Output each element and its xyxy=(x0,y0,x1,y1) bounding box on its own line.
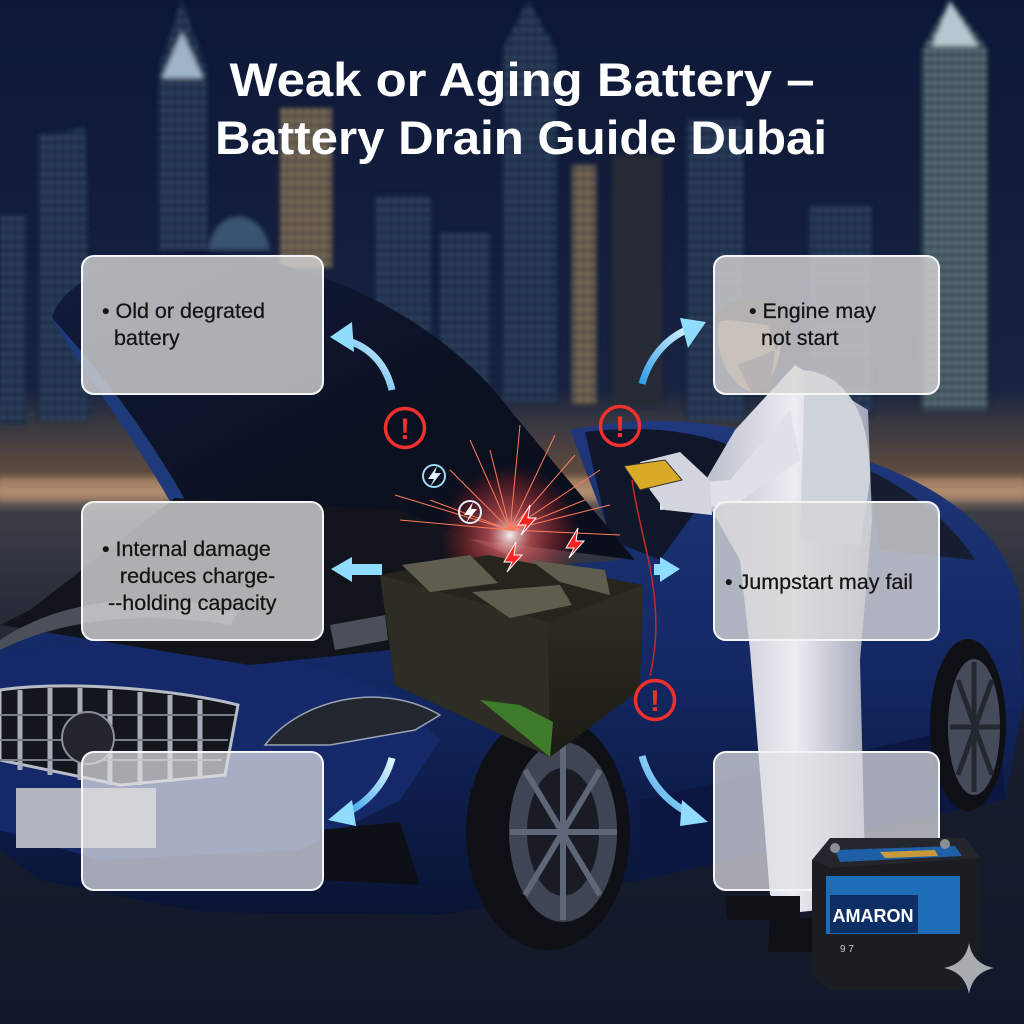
headlight xyxy=(265,697,440,745)
text: internal damage: • Internal damage reduces charge- ‐‐holding capacity xyxy=(102,537,276,615)
title: Weak or Aging Battery – xyxy=(230,53,814,106)
title xyxy=(215,53,827,164)
open hood xyxy=(52,252,635,560)
boots xyxy=(725,896,815,952)
sparks xyxy=(395,425,620,605)
arrow heads xyxy=(328,318,708,826)
arrows xyxy=(342,328,695,816)
alert icons: ! xyxy=(400,413,410,446)
panel: empty lower left xyxy=(81,751,324,891)
windshield and side window xyxy=(585,429,740,560)
mechanic xyxy=(624,297,872,952)
text: engine: • Engine may not start xyxy=(749,299,876,350)
engine bay xyxy=(0,498,520,665)
replacement battery: Amaron: AMARON xyxy=(832,906,914,926)
panel: internal damage xyxy=(81,501,324,641)
alert icons xyxy=(386,406,674,720)
gloves and multimeter xyxy=(640,452,712,515)
bolt badges xyxy=(423,465,584,572)
panel: empty lower right xyxy=(713,751,940,891)
sparkle watermark xyxy=(944,943,994,994)
replacement battery: Amaron: 9 7 xyxy=(840,944,854,955)
car body xyxy=(0,421,1024,950)
text: jumpstart: • Jumpstart may fail xyxy=(725,570,913,594)
probe wire xyxy=(632,480,656,676)
front wheel xyxy=(466,714,630,950)
alert icons: ! xyxy=(650,685,660,718)
alert icons: ! xyxy=(615,411,625,444)
rear wheel xyxy=(930,639,1006,811)
panel: old battery xyxy=(81,255,324,395)
text: old battery: • Old or degrated battery xyxy=(102,299,265,350)
replacement battery: Amaron xyxy=(812,838,980,990)
head xyxy=(718,302,782,393)
corroded battery xyxy=(380,555,643,757)
lower intake xyxy=(320,822,420,885)
license plate xyxy=(16,788,156,848)
panel: engine may not start xyxy=(713,255,940,395)
panel: jumpstart may fail xyxy=(713,501,940,641)
title: Battery Drain Guide Dubai xyxy=(215,111,827,164)
front grille xyxy=(0,686,238,785)
